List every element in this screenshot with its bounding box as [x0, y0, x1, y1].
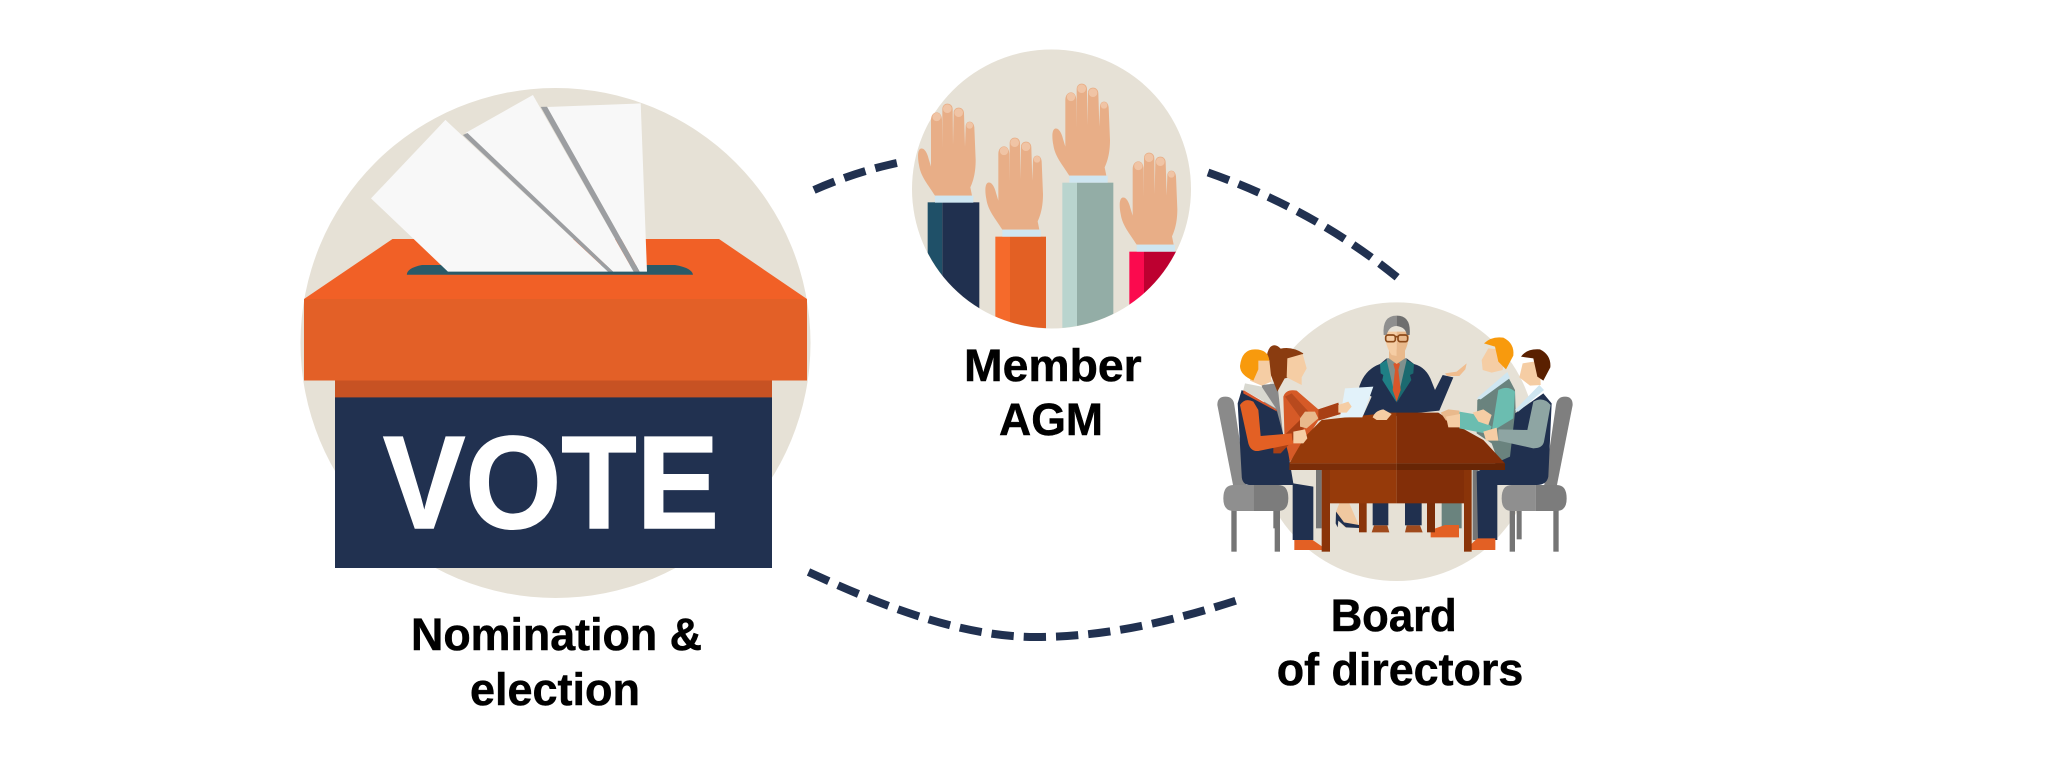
hand 4 — [1120, 153, 1177, 252]
ballot box body — [335, 380, 772, 568]
background circle: AGM — [912, 50, 1191, 328]
sleeve: navy — [928, 202, 980, 308]
background circle: vote — [300, 88, 810, 598]
caption: board of directors: of directors — [1277, 644, 1523, 695]
right teal director — [1431, 337, 1517, 537]
right front director — [1467, 349, 1552, 550]
back chair legs — [1273, 470, 1522, 540]
hands on table — [1293, 402, 1498, 443]
caption: nomination and election — [411, 609, 702, 715]
meeting table — [1289, 413, 1505, 552]
document on table — [1340, 387, 1373, 417]
caption: member AGM: Member — [964, 340, 1142, 391]
panel: board of directors — [1217, 302, 1573, 695]
raised hands illustration — [918, 84, 1181, 337]
box label: VOTE — [383, 409, 719, 556]
caption: nomination and election: Nomination & — [411, 609, 702, 660]
hand 2 — [985, 138, 1043, 237]
board meeting illustration — [1217, 302, 1573, 581]
arrow: AGM to board dashes — [1208, 172, 1398, 278]
panel: member AGM — [912, 50, 1191, 445]
hand 1 — [918, 104, 976, 203]
right chair — [1502, 397, 1573, 552]
sleeve: sage — [1062, 183, 1113, 336]
chairman — [1358, 316, 1467, 532]
woman director — [1262, 345, 1359, 528]
ballot box lid top — [304, 239, 807, 299]
ballot box lid front — [304, 299, 807, 380]
arrow: board to election dashes — [808, 572, 1238, 637]
left chair — [1217, 397, 1288, 552]
caption: nomination and election: election — [470, 664, 640, 715]
panel: nomination and election — [300, 88, 810, 715]
caption: member AGM: AGM — [999, 394, 1103, 445]
sleeve: crimson — [1129, 252, 1176, 305]
background circle: board — [1257, 302, 1536, 581]
arrow: election to AGM dashes — [814, 163, 897, 190]
ballot papers — [371, 95, 647, 272]
hand 3 — [1052, 84, 1110, 183]
caption: board of directors: Board — [1331, 590, 1457, 641]
left front director — [1238, 349, 1323, 550]
ballot slot — [407, 265, 693, 275]
caption: member AGM — [964, 340, 1142, 445]
sleeve: orange — [995, 237, 1046, 337]
caption: board of directors — [1277, 590, 1523, 695]
